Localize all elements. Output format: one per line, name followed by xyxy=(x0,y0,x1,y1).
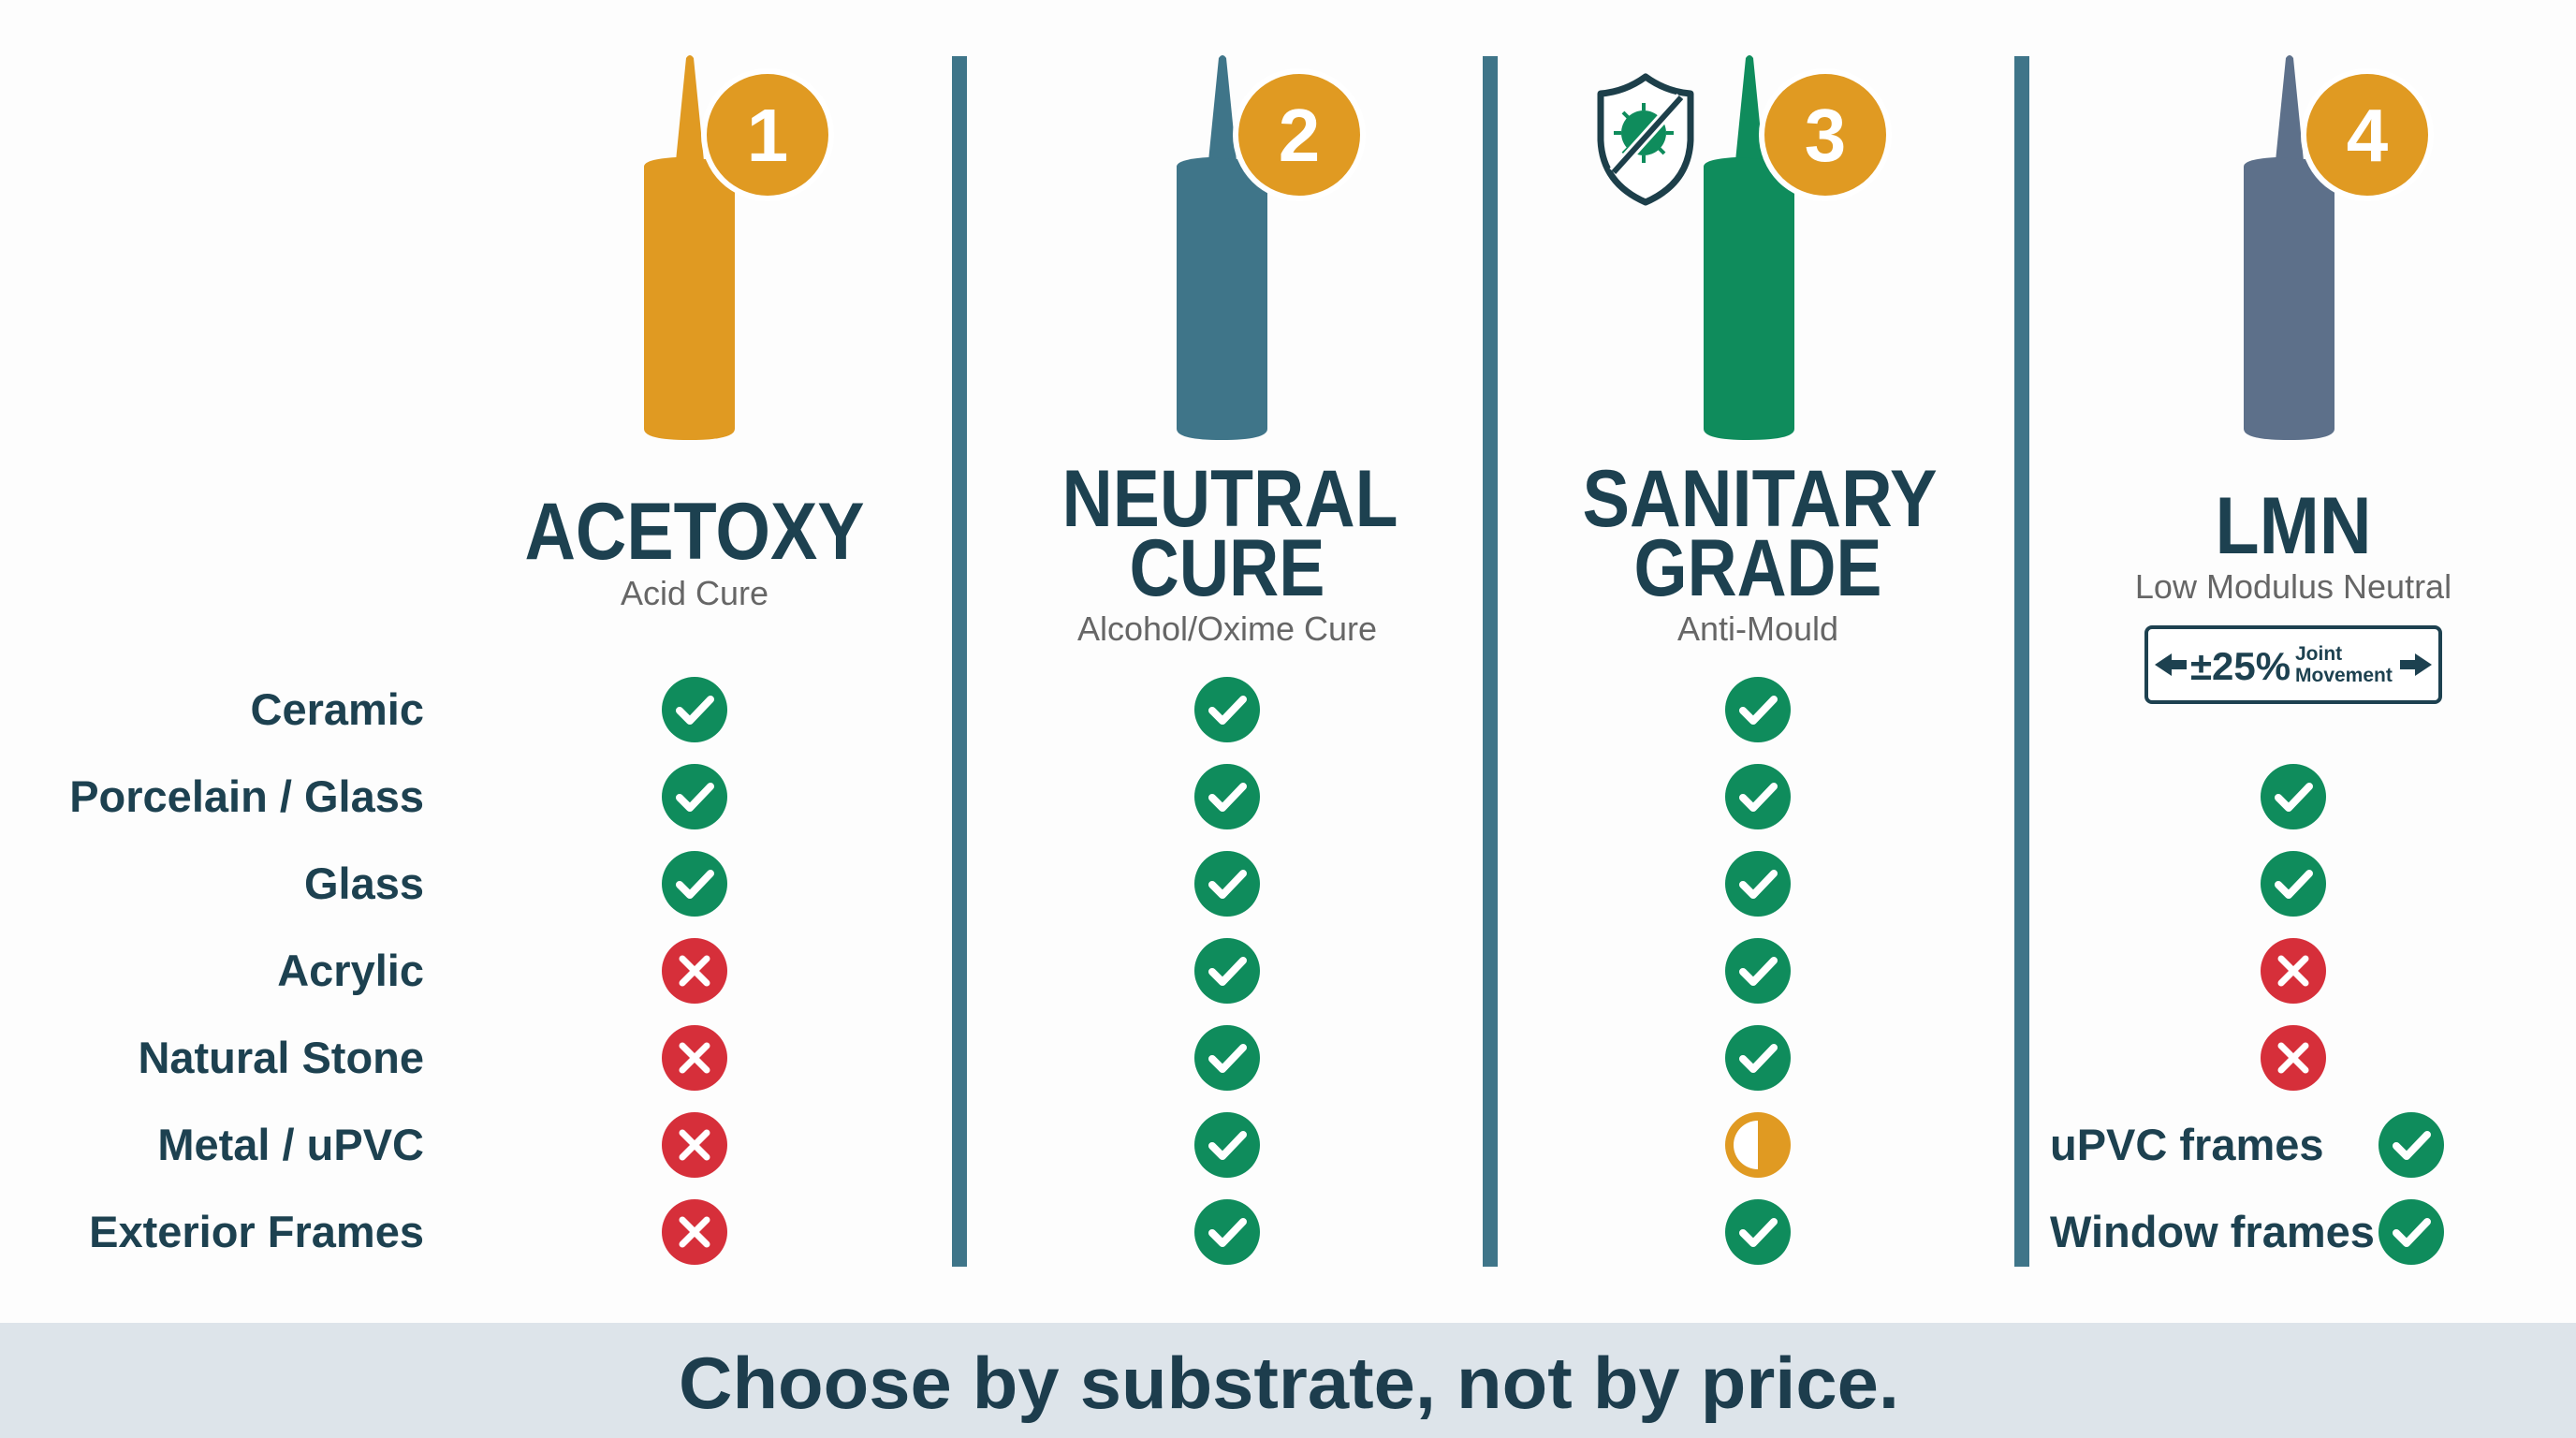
heading: NEUTRAL CURE: NEUTRAL xyxy=(1061,454,1398,544)
badge 1 xyxy=(701,68,834,201)
LMN marks: Window frames xyxy=(2050,1207,2375,1256)
subtitle: Low Modulus Neutral: Low Modulus Neutral xyxy=(2135,567,2452,606)
callout: joint movement box: ±25% xyxy=(2190,644,2291,688)
substrate row labels: Acrylic xyxy=(277,946,424,995)
icon: orange tube xyxy=(644,55,735,440)
column 2: neutral cure xyxy=(1061,55,1398,648)
column 1: acetoxy xyxy=(524,55,865,612)
substrate row labels: Ceramic xyxy=(251,684,424,734)
footer banner: Choose by substrate, not by price. xyxy=(679,1342,1899,1424)
column 3: sanitary grade xyxy=(1582,55,1938,648)
divider lines xyxy=(952,56,2029,1267)
icon: teal tube xyxy=(1177,55,1267,440)
substrate row labels xyxy=(69,684,424,1256)
subtitle: Anti-Mould: Anti-Mould xyxy=(1677,609,1838,648)
heading: LMN: LMN xyxy=(2215,481,2372,571)
LMN marks xyxy=(2050,764,2444,1265)
heading: SANITARY GRADE: GRADE xyxy=(1634,523,1881,613)
acetoxy marks xyxy=(662,677,727,1265)
subtitle: Alcohol/Oxime Cure: Alcohol/Oxime Cure xyxy=(1077,609,1377,648)
substrate row labels: Metal / uPVC xyxy=(157,1120,424,1169)
icon: green tube xyxy=(1704,55,1794,440)
badge 3 xyxy=(1759,68,1892,201)
badge 4 xyxy=(2301,68,2434,201)
substrate row labels: Porcelain / Glass xyxy=(69,771,424,821)
callout: joint movement box xyxy=(2146,627,2440,702)
heading: NEUTRAL CURE: CURE xyxy=(1129,523,1325,613)
subtitle: Acid Cure: Acid Cure xyxy=(621,574,768,612)
column 4: LMN xyxy=(2135,55,2452,702)
substrate row labels: Exterior Frames xyxy=(89,1207,424,1256)
heading: NEUTRAL CURE xyxy=(1061,454,1398,613)
heading: ACETOXY: ACETOXY xyxy=(524,487,865,577)
neutral cure marks xyxy=(1194,677,1260,1265)
badge 2 xyxy=(1233,68,1366,201)
badge 1: 1 xyxy=(747,94,788,177)
heading: SANITARY GRADE xyxy=(1582,454,1938,613)
callout: joint movement box: Joint xyxy=(2295,643,2342,665)
badge 3: 3 xyxy=(1805,94,1846,177)
LMN marks: uPVC frames xyxy=(2050,1120,2324,1169)
icon: antimicrobial shield xyxy=(1601,77,1690,202)
callout: joint movement box: Movement xyxy=(2295,665,2393,686)
badge 4: 4 xyxy=(2347,94,2389,177)
substrate row labels: Natural Stone xyxy=(138,1033,424,1082)
badge 2: 2 xyxy=(1279,94,1320,177)
icon: slate tube xyxy=(2244,55,2334,440)
sanitary marks xyxy=(1725,677,1791,1265)
substrate row labels: Glass xyxy=(304,858,424,908)
footer banner xyxy=(0,1323,2576,1438)
heading: SANITARY GRADE: SANITARY xyxy=(1582,454,1938,544)
